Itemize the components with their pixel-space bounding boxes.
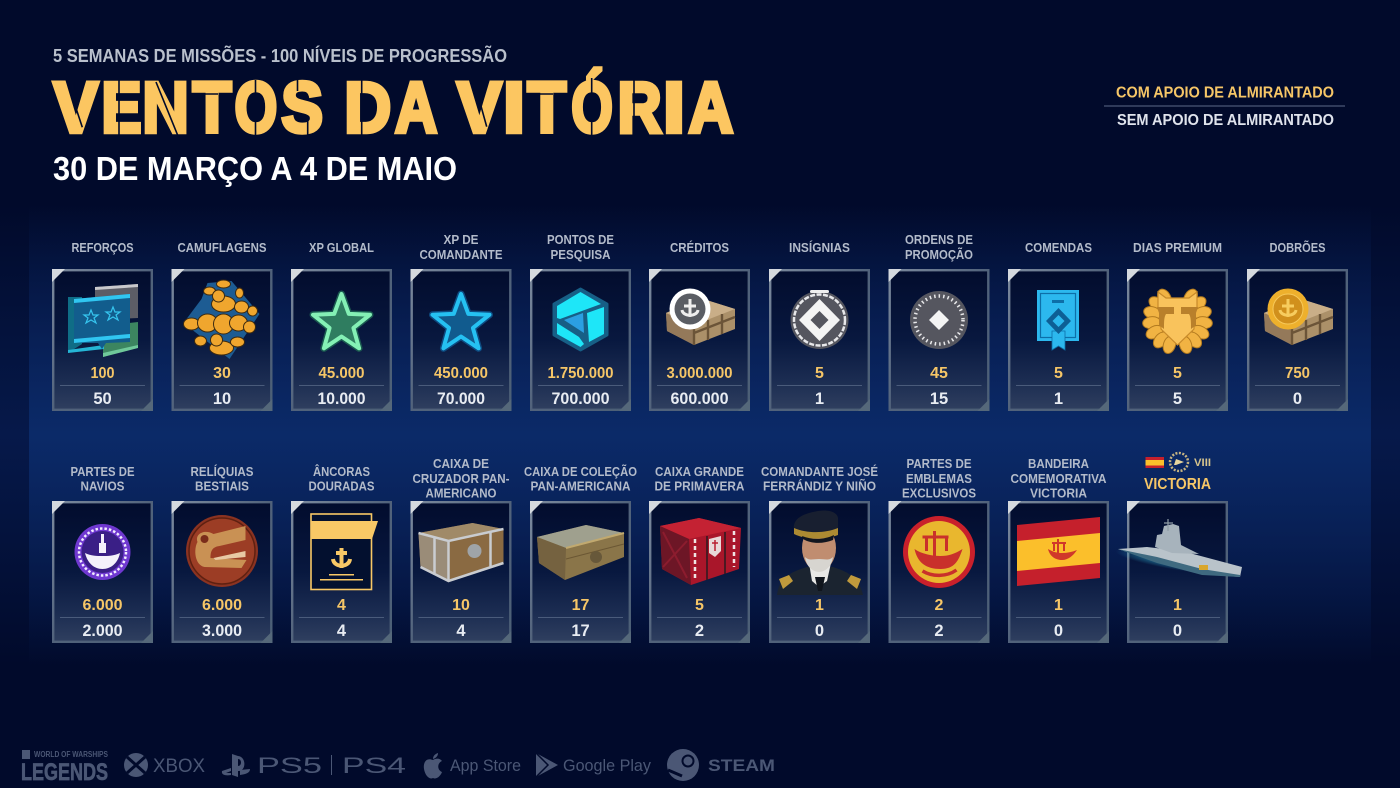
card: dobrões: [1247, 240, 1348, 411]
card: comandante josé ferrándiz y niño: [761, 464, 878, 643]
icon: promotion order: [910, 291, 968, 349]
value with admiral support: 5: [815, 365, 824, 382]
icon: beast relic: [186, 515, 258, 587]
label second line: PROMOÇÃO: [905, 247, 973, 262]
value without admiral support: 70.000: [437, 390, 485, 408]
icon: duck camouflage: [184, 280, 260, 359]
label: RELÍQUIAS: [190, 464, 254, 479]
value with admiral support: 6.000: [202, 597, 242, 614]
title: E: [102, 68, 142, 148]
value with admiral support: 6.000: [82, 597, 123, 614]
card: créditos: [649, 240, 750, 411]
card: partes de navios: [52, 464, 153, 643]
title: V: [54, 68, 98, 148]
value without admiral support: 1: [815, 390, 824, 408]
footer platform logos: [21, 749, 775, 786]
label second line: PAN-AMERICANA: [530, 478, 631, 494]
label: CRÉDITOS: [670, 240, 729, 255]
label second line: BESTIAIS: [195, 478, 249, 494]
label: DIAS PREMIUM: [1133, 240, 1222, 255]
title: A: [395, 68, 436, 148]
label: PONTOS DE: [547, 232, 614, 247]
label second line: NAVIOS: [80, 478, 125, 494]
value with admiral support: 4: [337, 597, 346, 614]
card: pontos de pesquisa: [530, 232, 631, 411]
logo: playstation 5 and 4: PS5: [257, 753, 322, 778]
label third line: VICTORIA: [1030, 486, 1088, 500]
label third line: EXCLUSIVOS: [902, 486, 976, 500]
logo: world of warships legends: WORLD OF WARSHIPS: [34, 750, 109, 759]
title: S: [281, 68, 323, 148]
label: ORDENS DE: [905, 232, 973, 247]
icon: ship parts: [74, 524, 130, 580]
icon: tier laurel: [1170, 453, 1188, 471]
value without admiral support: 700.000: [552, 390, 610, 408]
value with admiral support: 5: [1173, 365, 1182, 382]
value without admiral support: 1: [1054, 390, 1063, 408]
card: relíquias bestiais: [172, 464, 272, 643]
card: comendas: [1008, 240, 1109, 411]
value with admiral support: 5: [1054, 365, 1063, 382]
value without admiral support: 2: [695, 622, 704, 640]
icon: green star: [313, 294, 370, 348]
logo: steam: STEAM: [708, 756, 775, 775]
value with admiral support: 5: [695, 597, 704, 614]
value with admiral support: 1: [1054, 597, 1063, 614]
label third line: AMERICANO: [426, 486, 496, 500]
icon: research hexagon: [554, 289, 607, 350]
title: D: [344, 68, 391, 148]
label: ÂNCORAS: [313, 464, 370, 479]
value with admiral support: 45.000: [318, 365, 365, 382]
card: âncoras douradas: [291, 464, 392, 643]
icon: nation flag: [1146, 457, 1164, 468]
label: XP DE: [444, 232, 479, 247]
label: PARTES DE: [906, 456, 972, 471]
logo: playstation 5 and 4: PS4: [342, 753, 406, 778]
value with admiral support: 1.750.000: [548, 365, 614, 382]
logo: steam: [667, 749, 775, 781]
icon: blue star: [432, 294, 490, 348]
card: caixa de cruzador pan-americano: [410, 456, 512, 643]
icon: cruiser chest: [418, 523, 504, 581]
date: 30 DE MARÇO A 4 DE MAIO: [53, 150, 457, 187]
label: COMENDAS: [1025, 240, 1092, 255]
icon: ship victoria: [1114, 519, 1242, 580]
label second line: DE PRIMAVERA: [654, 478, 745, 494]
value with admiral support: 750: [1285, 365, 1310, 382]
title: O: [235, 68, 277, 148]
value with admiral support: 17: [572, 597, 590, 614]
ship name: VICTORIA: [1144, 476, 1211, 493]
icon: signal flags: [68, 284, 138, 357]
value without admiral support: 5: [1173, 390, 1182, 408]
card: victoria ship: [1114, 453, 1242, 643]
value without admiral support: 600.000: [670, 390, 728, 408]
logo: xbox: XBOX: [153, 756, 205, 777]
title: R: [618, 68, 662, 148]
card: partes de emblemas exclusivos: [888, 456, 990, 643]
subtitle: 5 SEMANAS DE MISSÕES - 100 NÍVEIS DE PROGRESSÃO: [53, 45, 507, 66]
value with admiral support: 3.000.000: [666, 365, 733, 382]
value with admiral support: 1: [815, 597, 824, 614]
logo: app store: App Store: [450, 756, 521, 775]
label: XP GLOBAL: [309, 240, 374, 255]
logo: google play: Google Play: [563, 756, 651, 775]
logo: world of warships legends: [21, 750, 109, 786]
value with admiral support: 45: [930, 365, 948, 382]
label: REFORÇOS: [72, 240, 134, 255]
logo: world of warships legends: LEGENDS: [21, 759, 108, 786]
icon: spring crate: [660, 518, 741, 585]
value with admiral support: 30: [213, 365, 231, 382]
logo: xbox: [124, 753, 205, 777]
card: camuflagens: [172, 240, 272, 411]
value without admiral support: 4: [337, 622, 347, 640]
label: CAIXA GRANDE: [655, 464, 744, 479]
logo: google play: [536, 753, 651, 777]
value without admiral support: 17: [571, 622, 590, 640]
label: DOBRÕES: [1270, 240, 1326, 255]
title: T: [528, 68, 566, 148]
label: CAIXA DE COLEÇÃO: [524, 464, 637, 479]
value without admiral support: 2: [934, 622, 944, 640]
card: insígnias: [769, 240, 870, 411]
label second line: EMBLEMAS: [906, 471, 972, 486]
value without admiral support: 50: [93, 390, 112, 408]
value without admiral support: 10.000: [318, 390, 366, 408]
card: caixa grande de primavera: [649, 464, 750, 643]
tier: VIII: [1194, 457, 1211, 469]
label second line: PESQUISA: [550, 247, 611, 262]
label: PARTES DE: [70, 464, 135, 479]
title: Ó: [571, 67, 613, 148]
card: xp global: [291, 240, 392, 411]
icon: doubloons crate with coin: [1264, 288, 1333, 345]
label second line: CRUZADOR PAN-: [412, 471, 510, 486]
card: dias premium: [1127, 240, 1228, 411]
title: I: [503, 68, 525, 148]
title: T: [193, 68, 231, 148]
label second line: FERRÁNDIZ Y NIÑO: [763, 478, 876, 494]
title: V: [457, 68, 502, 148]
label second line: DOURADAS: [308, 478, 375, 494]
value with admiral support: 100: [90, 365, 115, 382]
icon: credits crate with coin: [666, 288, 735, 345]
value without admiral support: 15: [930, 390, 948, 408]
value without admiral support: 4: [456, 622, 466, 640]
value without admiral support: 10: [213, 390, 231, 408]
label second line: COMANDANTE: [420, 247, 503, 262]
label: CAMUFLAGENS: [178, 240, 267, 255]
label: COMANDANTE JOSÉ: [761, 464, 878, 479]
card: reforços: [52, 240, 153, 411]
value with admiral support: 1: [1173, 597, 1182, 614]
icon: insignia: [790, 290, 848, 349]
icon: emblem: [903, 516, 975, 588]
label second line: COMEMORATIVA: [1010, 471, 1107, 486]
legend: SEM APOIO DE ALMIRANTADO: [1117, 112, 1334, 129]
card: bandeira comemorativa victoria: [1008, 456, 1109, 643]
legend: [1104, 84, 1345, 129]
card: ordens de promoção: [888, 232, 990, 411]
title: I: [663, 68, 685, 148]
title: A: [689, 68, 733, 148]
value without admiral support: 0: [1173, 622, 1182, 640]
icon: premium laurel: [1142, 287, 1213, 355]
card: xp de comandante: [410, 232, 512, 411]
logo: app store: [424, 753, 521, 778]
icon: collection chest: [537, 525, 624, 580]
legend: COM APOIO DE ALMIRANTADO: [1116, 84, 1334, 102]
value without admiral support: 0: [1054, 622, 1063, 640]
value without admiral support: 2.000: [82, 622, 122, 640]
value with admiral support: 450.000: [434, 365, 488, 382]
value with admiral support: 10: [452, 597, 470, 614]
value without admiral support: 0: [815, 622, 824, 640]
logo: playstation 5 and 4: [222, 753, 406, 778]
value without admiral support: 3.000: [202, 622, 242, 640]
value with admiral support: 2: [935, 597, 944, 614]
title: N: [142, 68, 189, 148]
icon: spanish flag: [1017, 517, 1100, 586]
value without admiral support: 0: [1293, 390, 1302, 408]
icon: commendation: [1037, 290, 1079, 350]
label: BANDEIRA: [1028, 456, 1090, 471]
icon: commander portrait: [777, 511, 863, 595]
label: CAIXA DE: [433, 456, 489, 471]
card: caixa de coleção pan-americana: [524, 464, 637, 643]
label: INSÍGNIAS: [789, 240, 850, 255]
icon: golden anchors: [311, 514, 378, 590]
